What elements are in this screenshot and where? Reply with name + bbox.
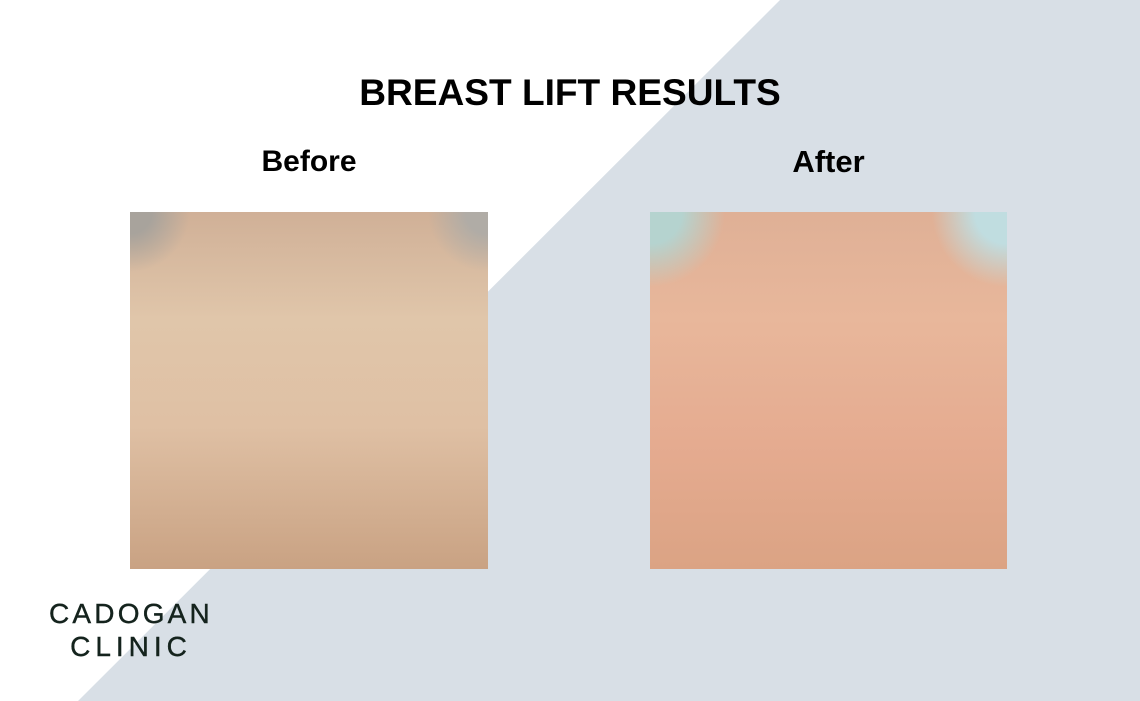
logo line: Cadogan: CADOGAN <box>49 598 213 629</box>
photo placeholder: before <box>130 212 488 569</box>
logo: Cadogan Clinic <box>49 598 213 662</box>
logo line: Clinic: CLINIC <box>70 631 192 662</box>
photo placeholder: after <box>650 212 1007 569</box>
title: BREAST LIFT RESULTS <box>359 71 781 113</box>
heading: after: After <box>792 144 865 179</box>
heading: before: Before <box>261 145 357 178</box>
